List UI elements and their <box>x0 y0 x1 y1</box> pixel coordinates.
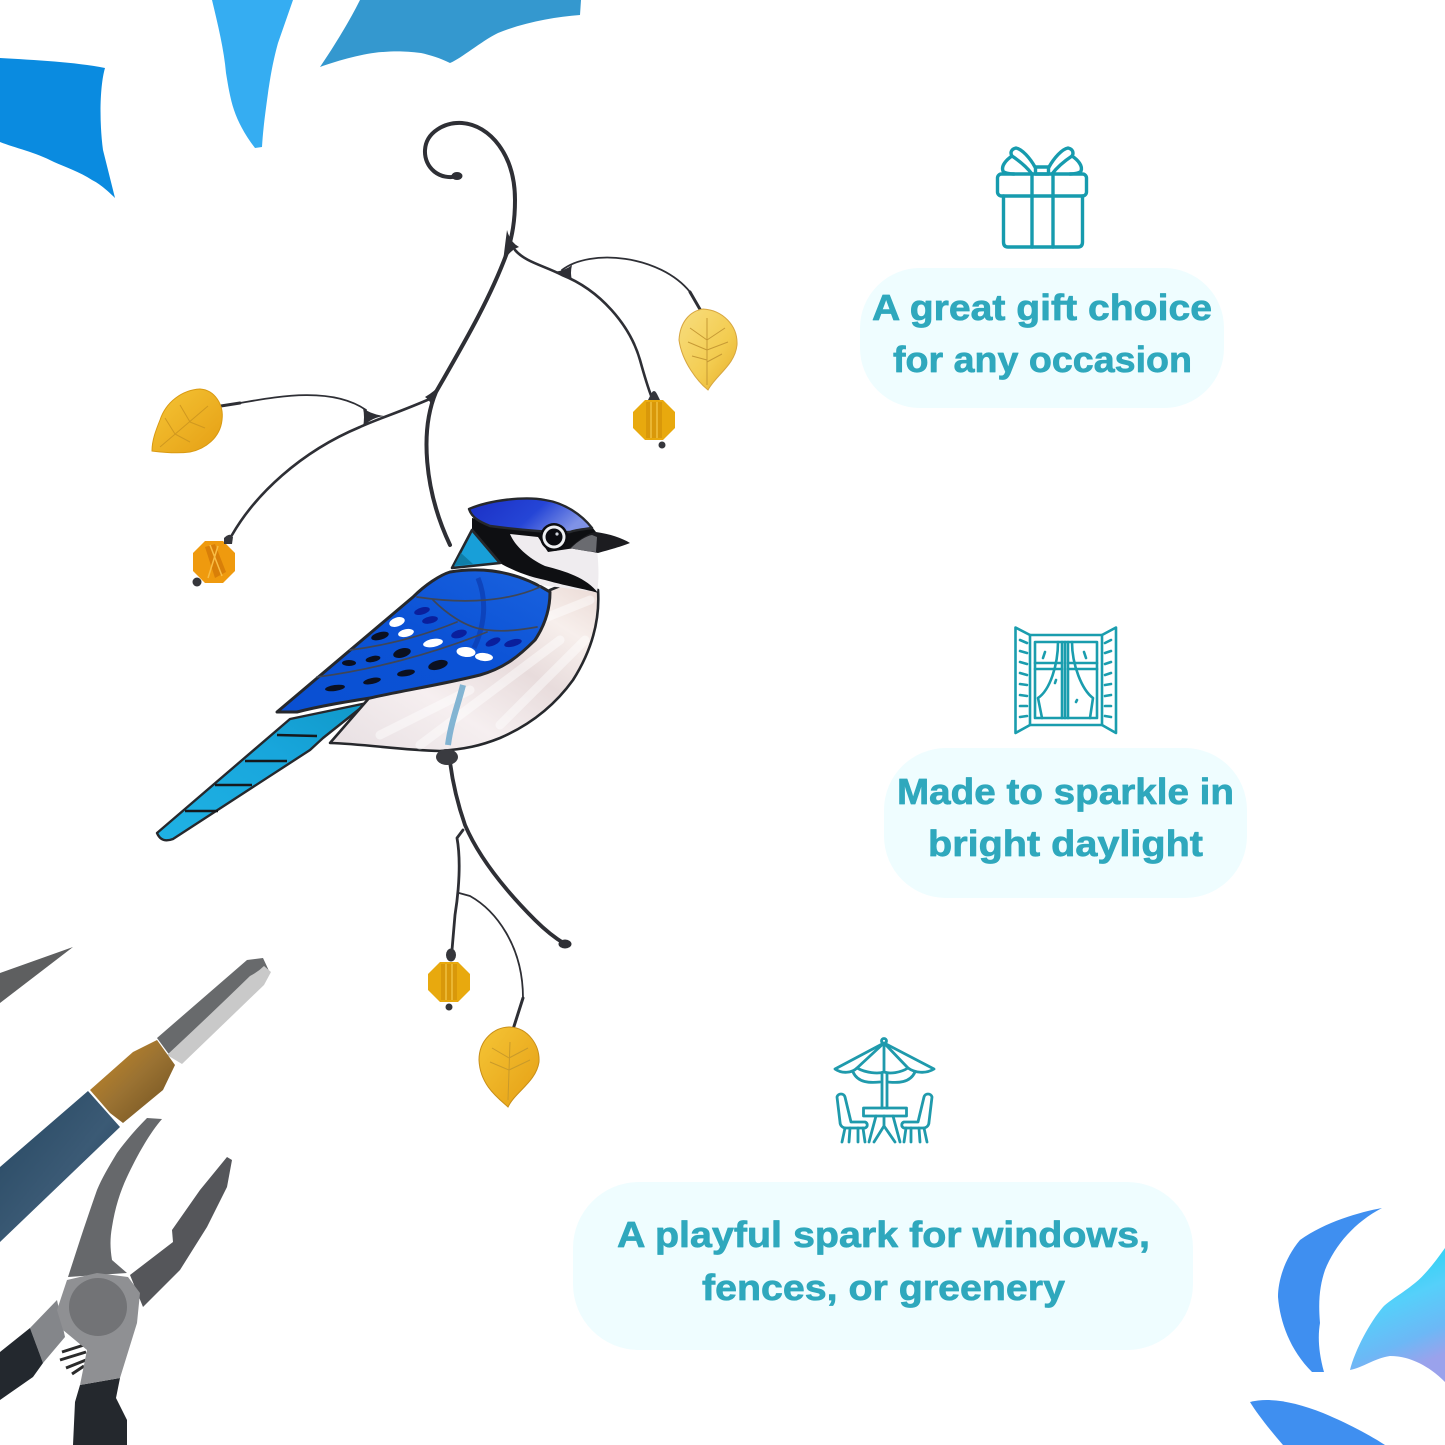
wing feather lines <box>317 587 540 677</box>
wing <box>277 570 550 712</box>
right branch to bead <box>515 250 652 398</box>
cutter brass collar <box>90 1040 175 1123</box>
cutter grey head <box>157 958 270 1063</box>
eye <box>540 523 568 551</box>
decorative glass shard: blue crescent <box>1278 1208 1382 1372</box>
decorative glass shard: cyan swirl <box>1350 1248 1445 1382</box>
left wire twist <box>208 403 240 408</box>
text: gift caption: for any occasion <box>893 339 1192 380</box>
right wire to leaf <box>562 258 690 292</box>
stem junction top <box>503 230 519 262</box>
icon: open window with shutters <box>1016 628 1116 733</box>
icon: patio table and umbrella <box>835 1038 934 1142</box>
cutter glassy edge <box>167 966 271 1064</box>
face white <box>490 525 598 592</box>
neck cyan patch <box>452 530 500 568</box>
black collar and mask <box>472 518 598 593</box>
left wire to leaf <box>240 395 366 410</box>
text: window caption: Made to sparkle in <box>897 771 1234 812</box>
wing spots <box>325 606 523 692</box>
pliers pivot <box>69 1278 127 1336</box>
pliers left lever <box>30 1300 65 1363</box>
decorative glass shard: top right <box>320 0 581 67</box>
bead: bottom <box>428 948 470 1010</box>
left junction <box>363 408 384 427</box>
pliers left grip <box>0 1328 43 1400</box>
main stem with hook <box>425 123 515 545</box>
leaf: left <box>152 389 222 453</box>
pill: gift caption <box>860 268 1224 408</box>
text: patio caption: A playful spark for windows, <box>617 1214 1150 1255</box>
foot solder blob <box>436 749 458 765</box>
tools: glass cutter, knife and pliers <box>0 947 271 1445</box>
hook end <box>452 172 462 180</box>
lower side wire to bead <box>452 830 463 950</box>
left branch to bead <box>232 398 432 535</box>
text: window caption: bright daylight <box>928 823 1203 864</box>
belly blue streak <box>448 685 463 745</box>
stem junction middle <box>425 382 443 405</box>
knife blade <box>0 947 73 1003</box>
suncatcher wire branches <box>208 123 705 1042</box>
tail <box>157 703 367 840</box>
decorative glass shard: top left <box>0 58 115 198</box>
pliers upper jaw <box>68 1118 162 1277</box>
lower wire twist <box>509 998 523 1042</box>
leaf: bottom <box>479 1027 539 1107</box>
text: gift caption: A great gift choice <box>872 287 1212 328</box>
cutter handle <box>0 1091 120 1242</box>
pill: window caption <box>884 748 1247 898</box>
icon: gift box <box>998 148 1086 247</box>
pliers lower grip <box>73 1378 127 1445</box>
pliers lower jaw <box>130 1157 232 1307</box>
leaf: right <box>679 309 737 390</box>
pill: patio caption <box>573 1182 1193 1350</box>
blue jay stained glass <box>157 498 630 840</box>
belly glass streaks <box>380 600 590 745</box>
pliers spring <box>60 1345 86 1374</box>
bead: right <box>633 391 675 448</box>
wing darker arc <box>474 578 484 648</box>
right junction <box>553 265 572 280</box>
pliers body <box>57 1273 140 1385</box>
bead: left orange <box>192 535 235 586</box>
right wire twist <box>690 292 705 318</box>
lower stem <box>450 762 565 944</box>
decorative glass shard: bottom blue <box>1250 1400 1385 1445</box>
decorative glass shard: top centre <box>212 0 293 148</box>
belly <box>330 582 598 751</box>
beak <box>570 532 630 553</box>
lower tip <box>558 940 572 948</box>
lower wire to leaf <box>459 893 523 998</box>
crest <box>469 498 592 532</box>
text: patio caption: fences, or greenery <box>702 1267 1065 1308</box>
